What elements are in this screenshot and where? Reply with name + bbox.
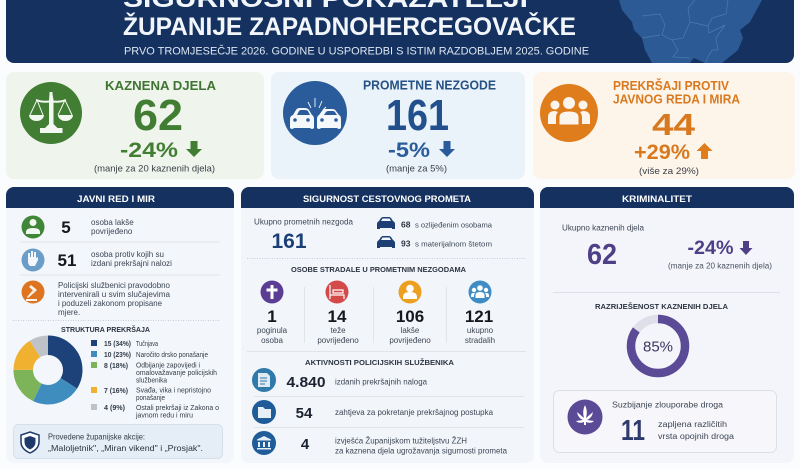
arrow down: [439, 141, 455, 157]
donut: 85%: 85%: [643, 338, 673, 356]
panel: javni red i mir: 5: [61, 218, 71, 237]
card: prekršaji: [533, 72, 795, 179]
title: ŽUPANIJE ZAPADNOHERCEGOVAČKE: [123, 11, 576, 41]
row: izvješća: 4: [301, 436, 310, 453]
legend: 10 (23%): [104, 352, 131, 359]
legend: Odbijanje zapovijedi i: [136, 362, 200, 370]
panel: javni red i mir: intervenirali u svim slučajevima: [58, 290, 171, 299]
panel: kriminalitet: KRIMINALITET: [622, 194, 692, 205]
panel: sigurnost cestovnog prometa: Ukupno prometnih nezgoda: [254, 218, 354, 226]
stat: poginula osoba: poginula: [257, 326, 288, 335]
donut chart: [23, 345, 73, 395]
panel: sigurnost cestovnog prometa: AKTIVNOSTI POLICIJSKIH SLUŽBENIKA: [305, 358, 455, 367]
stat: lakše povrijeđeno: povrijeđeno: [389, 336, 431, 345]
row: izvješća: [252, 431, 508, 456]
icon: cannabis leaf: [568, 400, 602, 434]
legend: Naročito drsko ponašanje: [136, 352, 208, 359]
panel: javni red i mir: STRUKTURA PREKRŠAJA: [61, 325, 151, 334]
panel: javni red i mir: izdani prekršajni nalozi: [91, 259, 172, 268]
panel: kriminalitet: -24%: [688, 238, 734, 259]
legend: 7 (16%): [104, 388, 128, 395]
panel: kriminalitet: [540, 187, 794, 463]
header banner: [6, 0, 794, 63]
legend: službenika: [136, 378, 167, 384]
stat: poginula osoba: osoba: [261, 336, 283, 345]
card: prometne nezgode: (manje za 5%): [386, 164, 447, 174]
stat: ukupno stradalih: 121: [465, 307, 493, 326]
panel: sigurnost cestovnog prometa: s materijalnom štetom: [415, 240, 492, 248]
card: kaznena djela: 62: [133, 91, 183, 140]
icon: crashed cars: [283, 81, 347, 145]
stat: ukupno stradalih: ukupno: [467, 326, 494, 335]
icon: people: [540, 84, 598, 142]
card: prekršaji: 44: [652, 107, 696, 142]
panel: javni red i mir: osoba lakše: [91, 218, 134, 227]
card: kaznena djela: (manje za 20 kaznenih djela): [94, 164, 215, 174]
card: prekršaji: +29%: [634, 141, 690, 164]
panel: kriminalitet: 62: [587, 239, 617, 271]
callout: actions: Provedene županijske akcije:: [48, 432, 145, 442]
panel: sigurnost cestovnog prometa: 68: [401, 220, 411, 230]
panel: javni red i mir: i poduzeli zakonom propisane: [58, 299, 163, 308]
legend: Tučnjava: [136, 341, 158, 348]
callout: droga: [554, 390, 776, 452]
panel: kriminalitet: (manje za 20 kaznenih djela): [668, 262, 772, 270]
card: prekršaji: JAVNOG REDA I MIRA: [613, 92, 740, 106]
card: kaznena djela: KAZNENA DJELA: [105, 79, 216, 93]
icon: gavel: [22, 280, 44, 304]
legend: 8 (18%): [104, 363, 128, 370]
icon: hand: [22, 248, 44, 272]
stat: poginula osoba: 1: [267, 307, 277, 326]
legend: 4 (9%): [104, 405, 125, 412]
stat: lakše povrijeđeno: lakše: [401, 326, 420, 335]
row: izvješća: za kaznena djela ugrožavanja sigurnosti prometa: [335, 446, 508, 456]
panel: kriminalitet: RAZRIJEŠENOST KAZNENIH DJELA: [595, 302, 729, 311]
legend: omalovažavanje policijskih: [136, 370, 217, 377]
panel: javni red i mir: mjere.: [58, 308, 80, 317]
legend: javnom redu i miru: [135, 412, 193, 420]
callout: droga: vrsta opojnih droga: [658, 432, 735, 441]
icon: car: [377, 217, 395, 229]
legend: ponašanje: [136, 395, 165, 402]
panel: javni red i mir: 51: [58, 251, 76, 270]
row: zahtjevi: 54: [296, 405, 313, 422]
icon: shield: [21, 432, 39, 453]
stat: ukupno stradalih: stradalih: [465, 336, 495, 345]
stat: teže povrijeđeno: [317, 280, 359, 345]
stat: lakše povrijeđeno: [389, 280, 431, 345]
icon: scales: [20, 82, 82, 144]
callout: droga: Suzbijanje zlouporabe droga: [612, 400, 724, 410]
subtitle: PRVO TROMJESEČJE 2026. GODINE U USPOREDBI S ISTIM RAZDOBLJEM 2025. GODINE: [124, 44, 589, 58]
panel: sigurnost cestovnog prometa: [241, 187, 534, 463]
stat: teže povrijeđeno: povrijeđeno: [317, 336, 359, 345]
panel: sigurnost cestovnog prometa: s ozlijeđenim osobama: [415, 220, 493, 230]
card: prometne nezgode: 161: [386, 91, 449, 140]
row: izvješća: izvješća Županijskom tužiteljstvu ŽZH: [335, 436, 467, 446]
card: prometne nezgode: -5%: [388, 139, 430, 162]
card: prekršaji: (više za 29%): [639, 166, 699, 177]
map of the county: [619, 0, 762, 63]
donut: 85%: [631, 319, 685, 373]
legend: [91, 340, 219, 420]
callout: actions: [14, 424, 222, 458]
panel: javni red i mir: JAVNI RED I MIR: [77, 194, 155, 205]
panel: javni red i mir: osoba protiv kojih su: [91, 250, 164, 259]
card: prometne nezgode: PROMETNE NEZGODE: [363, 78, 496, 92]
stat: poginula osoba: [257, 280, 288, 345]
arrow down: [186, 141, 202, 157]
stat: lakše povrijeđeno: 106: [396, 307, 424, 326]
panel: sigurnost cestovnog prometa: 93: [401, 238, 411, 248]
stat: ukupno stradalih: [465, 280, 495, 345]
title: [123, 0, 576, 41]
legend: 15 (34%): [104, 341, 131, 348]
row: zahtjevi: zahtjeva za pokretanje prekršajnog postupka: [335, 408, 494, 417]
panel: sigurnost cestovnog prometa: 161: [271, 230, 307, 253]
panel: javni red i mir: povrijeđeno: [91, 227, 133, 236]
icon: car: [377, 236, 395, 248]
card: kaznena djela: [6, 72, 264, 179]
stat: teže povrijeđeno: teže: [330, 326, 346, 335]
panel: kriminalitet: Ukupno kaznenih djela: [562, 224, 645, 232]
callout: droga: zapljena različitih: [658, 420, 727, 429]
callout: actions: „Maloljetnik", „Miran vikend" i „Prosjak".: [48, 443, 203, 453]
card: prometne nezgode: [271, 72, 525, 179]
panel: javni red i mir: [6, 187, 234, 463]
legend: Ostali prekršaji iz Zakona o: [136, 405, 219, 412]
panel: sigurnost cestovnog prometa: OSOBE STRADALE U PROMETNIM NEZGODAMA: [291, 265, 467, 274]
row: nalozi: [252, 368, 428, 392]
row: nalozi: izdanih prekršajnih naloga: [335, 378, 428, 386]
legend: Svađa, vika i nepristojno: [136, 388, 211, 394]
stat: teže povrijeđeno: 14: [328, 307, 347, 326]
arrow down: [740, 241, 752, 255]
row: nalozi: 4.840: [286, 374, 326, 391]
icon: injured person: [22, 216, 44, 238]
card: prekršaji: PREKRŠAJI PROTIV: [613, 78, 730, 93]
panel: javni red i mir: Policijski službenici pravodobno: [58, 281, 171, 290]
card: kaznena djela: -24%: [120, 139, 178, 162]
arrow up: [696, 143, 712, 159]
row: zahtjevi: [252, 400, 494, 424]
callout: droga: 11: [621, 415, 645, 447]
panel: sigurnost cestovnog prometa: SIGURNOST CESTOVNOG PROMETA: [303, 194, 471, 205]
